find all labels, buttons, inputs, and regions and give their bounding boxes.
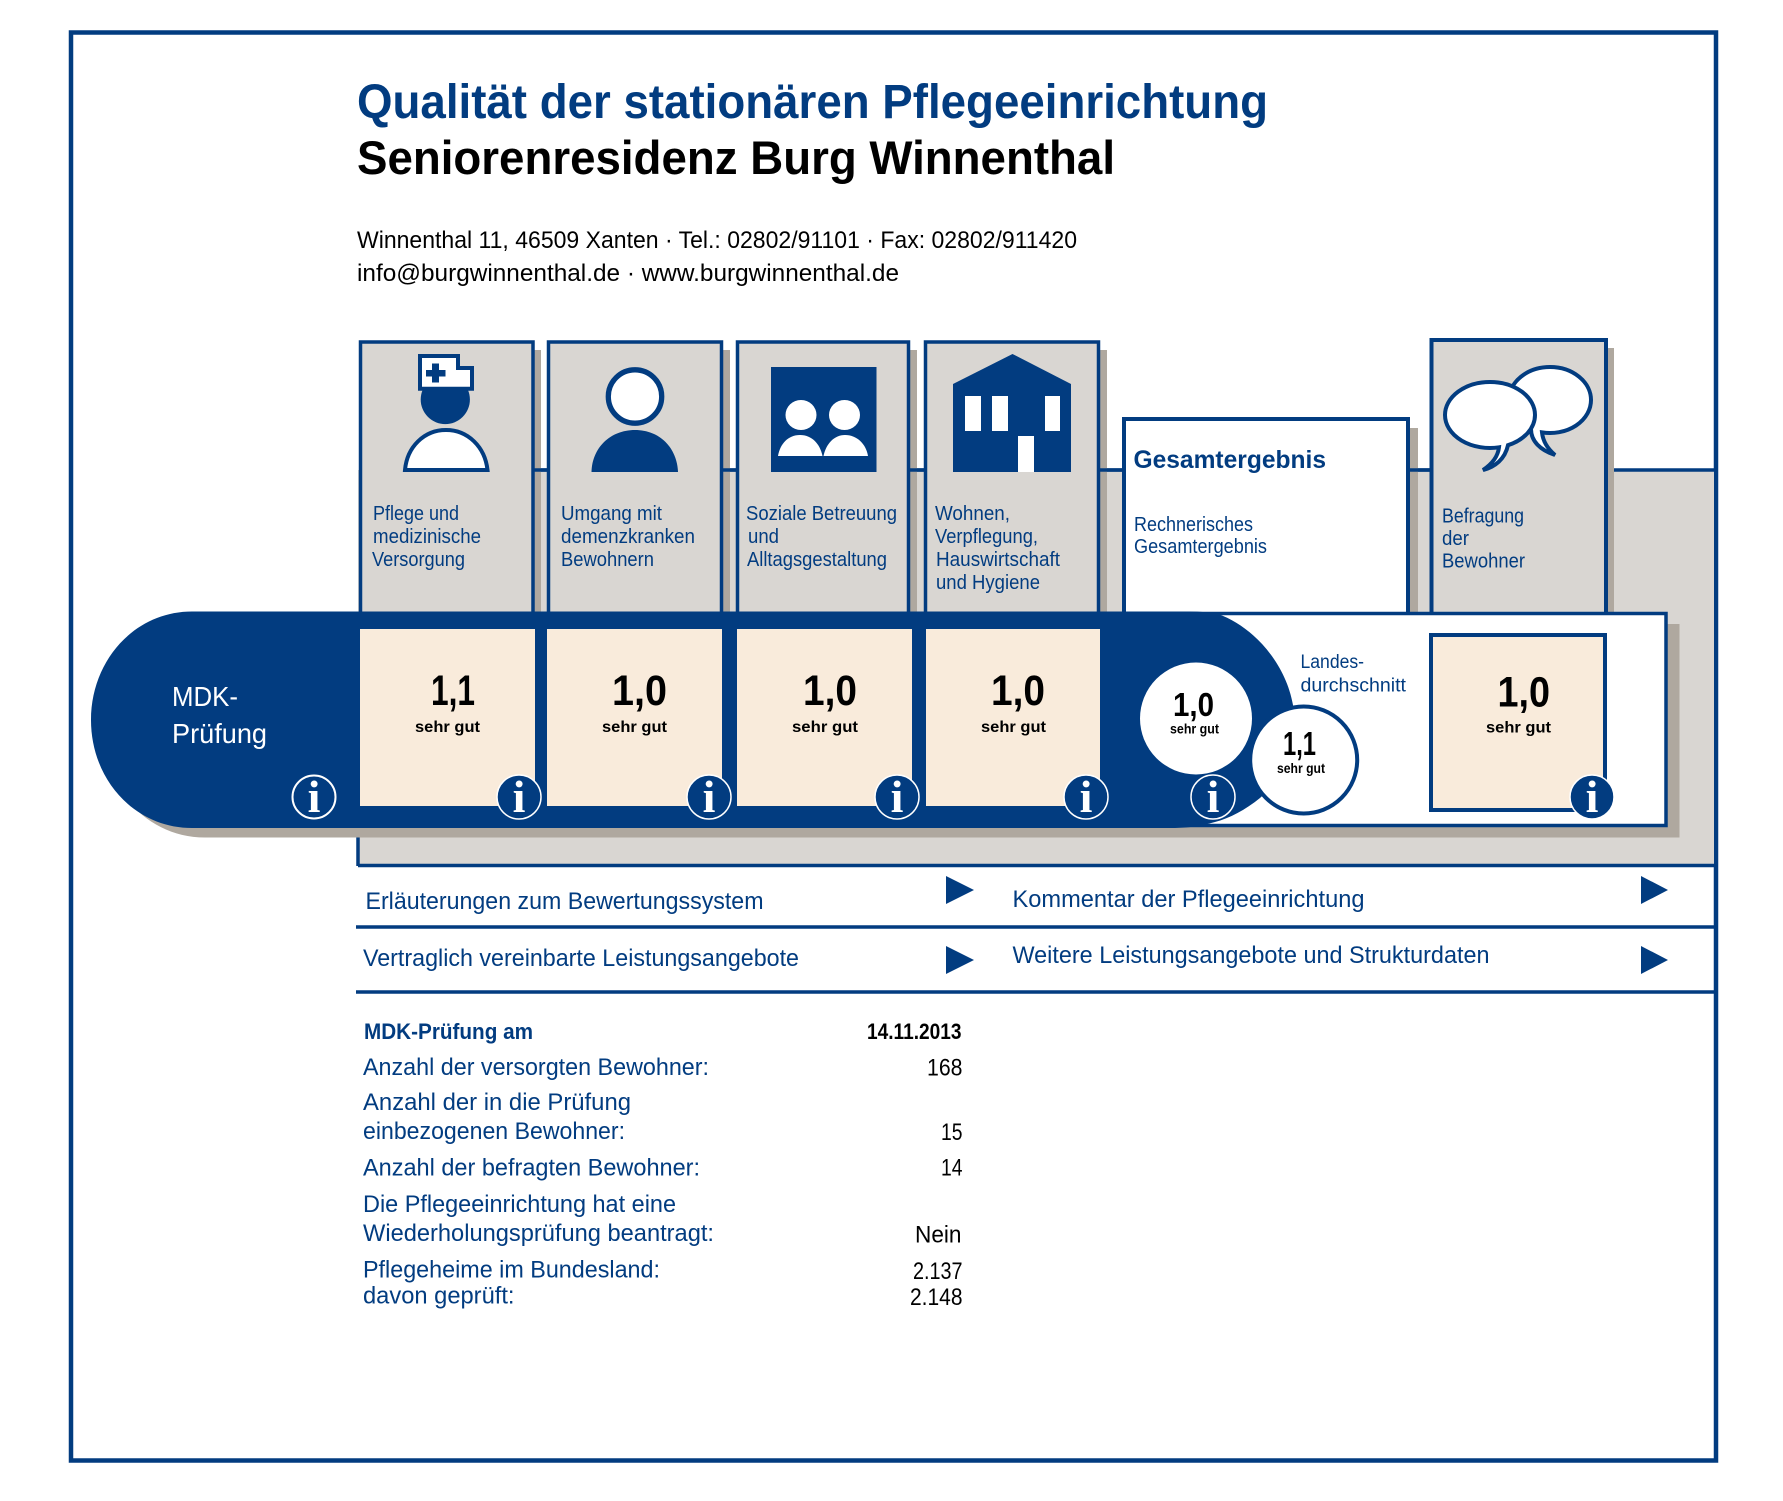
link: Weitere: Weitere Leistungsangebote und Strukturdaten (1012, 942, 1490, 969)
pill shadow (104, 622, 1200, 838)
icon: house (953, 354, 1071, 472)
card: Umgang mit demenzkranken Bewohnern: Bewohnern (561, 549, 654, 571)
score tile 1: sehr gut (415, 719, 481, 736)
title: Qualität der stationären Pflegeeinrichtung (357, 76, 1268, 129)
score tile: resident survey: 1,0 (1498, 668, 1550, 716)
inspection data table: 2.137 (913, 1258, 962, 1285)
heading: Gesamtergebnis: Gesamtergebnis (1134, 446, 1326, 474)
contact details: info@burgwinnenthal.de · www.burgwinnenthal.de (357, 260, 899, 287)
card: Soziale Betreuung und Alltagsgestaltung (738, 342, 908, 614)
inspection data table: Pflegeheime im Bundesland: (363, 1256, 660, 1284)
card: Soziale Betreuung und Alltagsgestaltung: Alltagsgestaltung (747, 549, 887, 571)
card: Wohnen, Verpflegung, Hauswirtschaft und Hygiene: und Hygiene (936, 572, 1040, 594)
score tile 2 (547, 629, 722, 806)
inspection data table: 14.11.2013 (867, 1019, 962, 1044)
icon: info: i (891, 771, 904, 822)
score tile: resident survey: sehr gut (1486, 720, 1552, 736)
arrow (1641, 876, 1668, 904)
icon: info (292, 771, 336, 822)
inspection data table: Wiederholungsprüfung beantragt: (363, 1220, 714, 1247)
icon: info (687, 771, 731, 822)
state average circle (1250, 706, 1357, 814)
inspection data table (363, 1019, 962, 1311)
icon: info: i (1080, 771, 1093, 822)
link: Erläuterungen: Erläuterungen zum Bewertungssystem (366, 888, 764, 915)
icon: info: i (1207, 771, 1220, 822)
inspection data table: Nein (915, 1222, 962, 1248)
icon: info (1191, 771, 1235, 822)
card: Wohnen, Verpflegung, Hauswirtschaft und Hygiene: Wohnen, (935, 503, 1010, 525)
card: Wohnen, Verpflegung, Hauswirtschaft und Hygiene (926, 342, 1098, 614)
icon: info: i (703, 771, 716, 822)
subtitle: Seniorenresidenz Burg Winnenthal (357, 131, 1115, 184)
link: Kommentar: Kommentar der Pflegeeinrichtung (1012, 886, 1364, 913)
icon: info: i (513, 771, 526, 822)
card: Befragung der Bewohner: Bewohner (1442, 550, 1525, 572)
inspection data table: 2.148 (910, 1284, 962, 1311)
overall score circle: sehr gut (1170, 722, 1219, 736)
grey background panel (358, 470, 1714, 865)
card: Pflege und medizinische Versorgung: medizinische (373, 526, 481, 548)
inspection data table: 168 (927, 1054, 962, 1082)
link: Vertraglich: Vertraglich vereinbarte Leistungsangebote (363, 945, 799, 972)
icon: info (1570, 771, 1614, 822)
overall score circle (1140, 662, 1252, 774)
card: Pflege und medizinische Versorgung: Pflege und (373, 503, 459, 525)
score tile 1 (360, 629, 535, 806)
score tile 4: sehr gut (981, 719, 1047, 736)
icon: info (497, 771, 541, 822)
state average circle: 1,1 (1283, 725, 1316, 762)
arrow (946, 946, 974, 974)
score tile: resident survey (1431, 635, 1605, 810)
white result panel (1150, 614, 1666, 826)
overall score circle: 1,0 (1173, 686, 1214, 723)
state average label (1300, 652, 1407, 696)
contact details: Winnenthal 11, 46509 Xanten · Tel.: 02802/91101 · Fax: 02802/911420 (357, 227, 1077, 254)
inspection data table: Anzahl der befragten Bewohner: (363, 1154, 700, 1182)
state average label: durchschnitt (1300, 676, 1407, 696)
card: Befragung der Bewohner: der (1442, 528, 1469, 550)
inspection data table: 14 (941, 1154, 962, 1182)
card: Wohnen, Verpflegung, Hauswirtschaft und Hygiene: Hauswirtschaft (936, 549, 1060, 571)
score tile 3: sehr gut (792, 719, 859, 736)
card: Befragung der Bewohner (1432, 340, 1606, 614)
icon: nurse (405, 356, 488, 470)
inspection data table: Anzahl der in die Prüfung (363, 1089, 631, 1116)
inspection data table: Die Pflegeeinrichtung hat eine (363, 1191, 676, 1218)
icon: person (592, 370, 678, 472)
card: Wohnen, Verpflegung, Hauswirtschaft und Hygiene: Verpflegung, (935, 526, 1038, 548)
MDK band (91, 612, 1293, 828)
card: Pflege und medizinische Versorgung (360, 342, 533, 614)
card: Pflege und medizinische Versorgung: Versorgung (372, 549, 465, 571)
inspection data table: einbezogenen Bewohner: (363, 1118, 625, 1145)
icon: info: i (1586, 771, 1599, 822)
card: Befragung der Bewohner: Befragung (1442, 506, 1524, 528)
score tile 3 (737, 629, 912, 806)
state average circle: sehr gut (1277, 761, 1325, 776)
card: Gesamtergebnis: Rechnerisches (1134, 514, 1253, 536)
card: Soziale Betreuung und Alltagsgestaltung: Soziale Betreuung (746, 503, 897, 525)
inspection data table: MDK-Prüfung am (364, 1019, 533, 1044)
icon: speech bubbles (1445, 367, 1591, 470)
inspection data table: Anzahl der versorgten Bewohner: (363, 1054, 709, 1081)
card: Umgang mit demenzkranken Bewohnern: demenzkranken (561, 526, 695, 548)
icon: info (1064, 771, 1108, 822)
arrow (946, 876, 974, 904)
inspection data table: davon geprüft: (363, 1282, 514, 1310)
band line between cards (534, 468, 1430, 472)
card: Soziale Betreuung und Alltagsgestaltung: und (748, 526, 779, 548)
card: Gesamtergebnis: Gesamtergebnis (1134, 536, 1267, 558)
score tile 3: 1,0 (803, 667, 857, 715)
band label (172, 681, 267, 749)
card: Gesamtergebnis (1124, 419, 1408, 614)
icon: info (875, 771, 919, 822)
white panel shadow (1170, 624, 1680, 838)
icon: info: i (308, 771, 321, 822)
score tile 4: 1,0 (991, 667, 1045, 715)
band label: MDK- (172, 681, 238, 712)
score tile 1: 1,1 (431, 667, 475, 715)
band label: Prüfung (172, 718, 267, 749)
state average label: Landes- (1300, 652, 1364, 673)
contact details (357, 227, 1077, 287)
score tile 2: 1,0 (612, 667, 667, 715)
icon: group (771, 367, 876, 472)
card: Umgang mit demenzkranken Bewohnern: Umgang mit (561, 503, 662, 525)
card shadows (534, 348, 1614, 612)
arrow (1641, 946, 1668, 974)
score tile 2: sehr gut (602, 719, 668, 736)
inspection data table: 15 (941, 1119, 962, 1146)
score tile 4 (926, 629, 1100, 806)
link rows (356, 876, 1716, 992)
card: Umgang mit demenzkranken Bewohnern (548, 342, 722, 614)
title block (357, 76, 1268, 184)
